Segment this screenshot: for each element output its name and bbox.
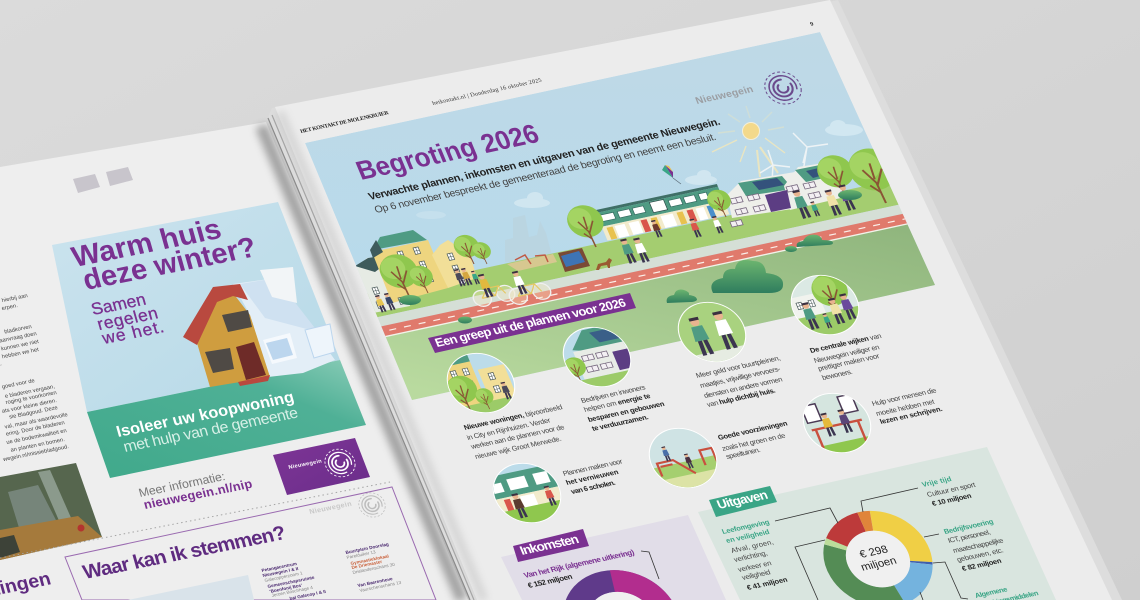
sidewalk (378, 204, 902, 326)
location list: Petangacentrum (261, 561, 297, 573)
green foreground (360, 217, 940, 402)
ad subheading (89, 289, 166, 348)
location list: De Driemaster (351, 559, 383, 570)
income banner (513, 529, 589, 562)
label: operations: gebouwen, etc. (955, 546, 1005, 564)
article text fragment: e bladeren vergaan, (4, 384, 56, 400)
income label: Van het Rijk (algemene uitkering) (522, 548, 636, 580)
text block: energy: besparen en gebouwen (586, 399, 666, 424)
white houses with solar roofs (727, 162, 845, 227)
page surface (275, 0, 1112, 600)
icon: half knitted half frozen house (183, 267, 335, 387)
location list: Gymnastieklokaal (350, 554, 389, 566)
text block: neighbourhood help: Meer geld voor buurtpleinen, (694, 354, 782, 380)
small logo: Nieuwegein (309, 501, 353, 516)
ad: teal band (87, 360, 366, 478)
location list: Nieuwegein I & II (262, 566, 299, 578)
ad band text: met hulp van de gemeente (122, 405, 300, 456)
panel: expenses (698, 447, 1056, 600)
photo: leaves and fence (0, 463, 102, 560)
label: free time: Vrije tijd (920, 474, 953, 489)
label: operations: Bedrijfsvoering (942, 517, 995, 536)
text block: new homes (462, 403, 566, 461)
ad more information: Meer informatie: (137, 469, 227, 500)
ad band text: Isoleer uw koopwoning (114, 388, 296, 441)
circle: reading and writing help (802, 393, 872, 453)
text block: reading help: Hulp voor mensen die (870, 386, 938, 408)
location list: Parelduiker 13 (346, 549, 377, 560)
label: operations: ICT, personeel, (946, 528, 992, 545)
text block: energy (579, 383, 666, 433)
location list: Gemeenschapsruimte (267, 575, 316, 589)
location list: 'Boenfonij Bos' (269, 583, 303, 594)
leader lines (775, 488, 968, 600)
distant city (505, 215, 554, 263)
donut centre label: € 298 (858, 544, 890, 561)
logo: Nieuwegein (695, 72, 802, 104)
text block: reading help (870, 386, 944, 426)
circle: schools (492, 463, 562, 523)
text block: new homes: in City en Rijnhuizen. Verder (465, 416, 552, 442)
trees (380, 148, 890, 296)
bike road (381, 214, 908, 336)
expenses donut (799, 494, 957, 600)
article text fragment: sie Bladgoud. Deze (9, 405, 59, 421)
spine edge lines (268, 115, 474, 600)
ad more information: nieuwegein.nl/nip (142, 477, 254, 512)
text block: central districts: De centrale wijken van (808, 331, 883, 355)
circle: energy saving house (562, 326, 632, 387)
article text fragment: wegein.nl/missiebladgoud. (2, 444, 70, 463)
page stack (268, 0, 1122, 600)
article text fragment: an planten en bomen. (10, 437, 66, 454)
voting heading: Waar kan ik stemmen? (80, 522, 288, 584)
text block: schools (561, 457, 624, 496)
soft page curve shade (280, 112, 484, 600)
location list: Galecopperzoom 1 (264, 571, 304, 583)
article text fragment: roging te voorkomen (5, 390, 58, 406)
location list: Buurtplein Doorslag (345, 542, 390, 555)
label: free time (920, 474, 977, 508)
article text fragment: ats voor kleine dieren. (1, 398, 58, 415)
article text fragment: ering. Door de bladeren (5, 420, 66, 438)
ad subheading: regelen (95, 303, 160, 334)
text block: central districts: bewoners. (820, 367, 854, 382)
location list: Van Baerenhove (357, 576, 394, 588)
people (374, 184, 857, 313)
subtitle bold: Verwachte plannen, inkomsten en uitgaven van de gemeente Nieuwegein. (367, 116, 722, 203)
location list: Vaurschenschans 13 (359, 580, 402, 593)
text block: neighbourhood help: diensten en andere vormen (702, 375, 784, 400)
text block: neighbourhood help: van hulp dichtbij huis. (705, 386, 777, 409)
newspaper header (299, 22, 815, 135)
circle: new homes (446, 352, 516, 413)
label: living environment: Afval, groen, (729, 538, 775, 555)
text block: reading help: moeite hebben met (874, 397, 936, 418)
grey page markers (73, 167, 133, 193)
title: Begroting 2026 (352, 118, 543, 185)
donut centre label (858, 544, 899, 573)
small logo (309, 487, 393, 523)
yellow apartment building (355, 230, 477, 313)
icon: kite (662, 165, 681, 184)
text block: neighbourhood help: maatjes, vrijwillige vervoers- (698, 364, 782, 390)
ad subheading: Samen (89, 289, 148, 319)
location list: Jeroen Boschhage 4 (271, 585, 314, 598)
circle: central districts (790, 274, 860, 335)
logo: Nieuwegein: Nieuwegein (694, 84, 755, 107)
wind turbines (760, 132, 828, 176)
icon: dog (596, 258, 612, 270)
text block: new homes: Nieuwe woningen, bijvoorbeeld (462, 403, 564, 432)
label: living environment (720, 518, 789, 592)
text block: facilities: speeltuinen. (724, 445, 762, 461)
text block: facilities (716, 419, 789, 461)
article text fragment: hebben we het (1, 347, 40, 360)
label: operations: € 82 miljoen (960, 556, 1003, 573)
ad subheading: we het. (99, 317, 166, 348)
text block: new homes: werken aan de plannen voor de (468, 423, 566, 451)
panel: income (501, 515, 726, 600)
ad heading: deze winter? (79, 232, 260, 297)
expenses banner: Uitgaven (714, 487, 770, 512)
location list: Drielandenschans 30 (352, 562, 396, 575)
text block: facilities: Goede voorzieningen (716, 419, 789, 442)
article text fragment: hierbij aan (1, 293, 29, 304)
ad: sky background (52, 202, 340, 412)
label: operations (942, 517, 1005, 573)
ad logo block (273, 438, 370, 495)
text block: central districts: Nieuwegein veiliger en (812, 343, 881, 365)
article text fragment: goed voor de (1, 378, 36, 390)
label: operations: maatschappelijke (951, 536, 1005, 555)
road edge (385, 223, 908, 337)
cyclists (470, 270, 553, 308)
text block: energy: te verduurzamen. (590, 413, 650, 433)
label: living environment: verlichting, (732, 549, 769, 564)
article text fragment: erpen. (1, 303, 19, 312)
sun with rays (712, 106, 785, 177)
sign board (558, 248, 590, 272)
text block: schools: Plannen maken voor (561, 457, 624, 478)
text block: energy: Bedrijven en inwoners (579, 383, 647, 405)
text block: central districts (808, 331, 883, 382)
label: free time: Cultuur en sport (925, 480, 977, 499)
playground (507, 254, 557, 271)
text block: central districts: prettiger maken voor (816, 351, 881, 373)
bushes (399, 190, 862, 324)
subtitle regular: Op 6 november bespreekt de gemeenteraad de begroting en neemt een besluit. (373, 132, 718, 216)
ad heading: Warm huis (68, 214, 225, 274)
newspaper header: HET KONTAKT DE MOLENKRUIER (299, 110, 391, 135)
panel: voting locations box (65, 487, 436, 600)
income banner: Inkomsten (517, 532, 581, 558)
grass (368, 181, 898, 318)
spine shadow (261, 126, 462, 600)
article text fragment: ue de bodemkwaliteit en (6, 428, 68, 446)
newspaper header: 9 (809, 22, 815, 28)
label: general funds: Algemene (973, 585, 1009, 600)
article text fragment (0, 293, 70, 463)
text block: reading help: lezen en schrijven. (878, 404, 944, 426)
text block: new homes: nieuwe wijk Groot Merwede. (473, 434, 563, 461)
ad logo block: Nieuwegein (288, 458, 323, 471)
income donut (553, 566, 691, 600)
map (128, 575, 254, 600)
article text fragment: val, maar als waardevolle (4, 412, 69, 430)
newspaper header: hetkontakt.nl | Donderdag 16 oktober 2025 (431, 78, 543, 107)
article text fragment: bladkorven (4, 324, 33, 335)
circle: playground (648, 428, 718, 488)
sky (305, 32, 935, 400)
heading banner: plans: Een greep uit de plannen voor 2026 (433, 296, 628, 350)
illustration panel: town scene (305, 32, 940, 402)
label: living environment: € 41 miljoen (745, 575, 789, 592)
text block: neighbourhood help (694, 354, 784, 409)
road dashes (389, 218, 905, 331)
text block: facilities: zoals het groen en de (720, 431, 787, 453)
panel: left magazine page (0, 122, 468, 600)
text block: energy: helpen om energie te (582, 391, 652, 414)
income leader line (641, 551, 659, 579)
dotted separator (0, 482, 390, 558)
label: living environment: verkeer en (736, 559, 773, 574)
clouds (416, 120, 863, 219)
article text fragment: kunnen we niet (0, 339, 40, 352)
text block: schools: het vernieuwen (564, 467, 620, 487)
label: general funds (973, 585, 1040, 600)
location list (261, 542, 402, 600)
circle: neighbourhood help (678, 302, 746, 362)
school building (595, 184, 729, 241)
label: living environment: Leefomgeving (720, 518, 771, 536)
panel: right magazine page (268, 0, 1122, 600)
label: living environment: veiligheid (740, 568, 772, 582)
label: free time: € 10 miljoen (930, 491, 973, 508)
income label: € 152 miljoen (526, 572, 574, 590)
label: living environment: en veiligheid (724, 527, 771, 545)
text block: schools: van 6 scholen. (569, 478, 617, 496)
expenses banner (709, 486, 777, 517)
donut centre label: miljoen (859, 555, 899, 573)
